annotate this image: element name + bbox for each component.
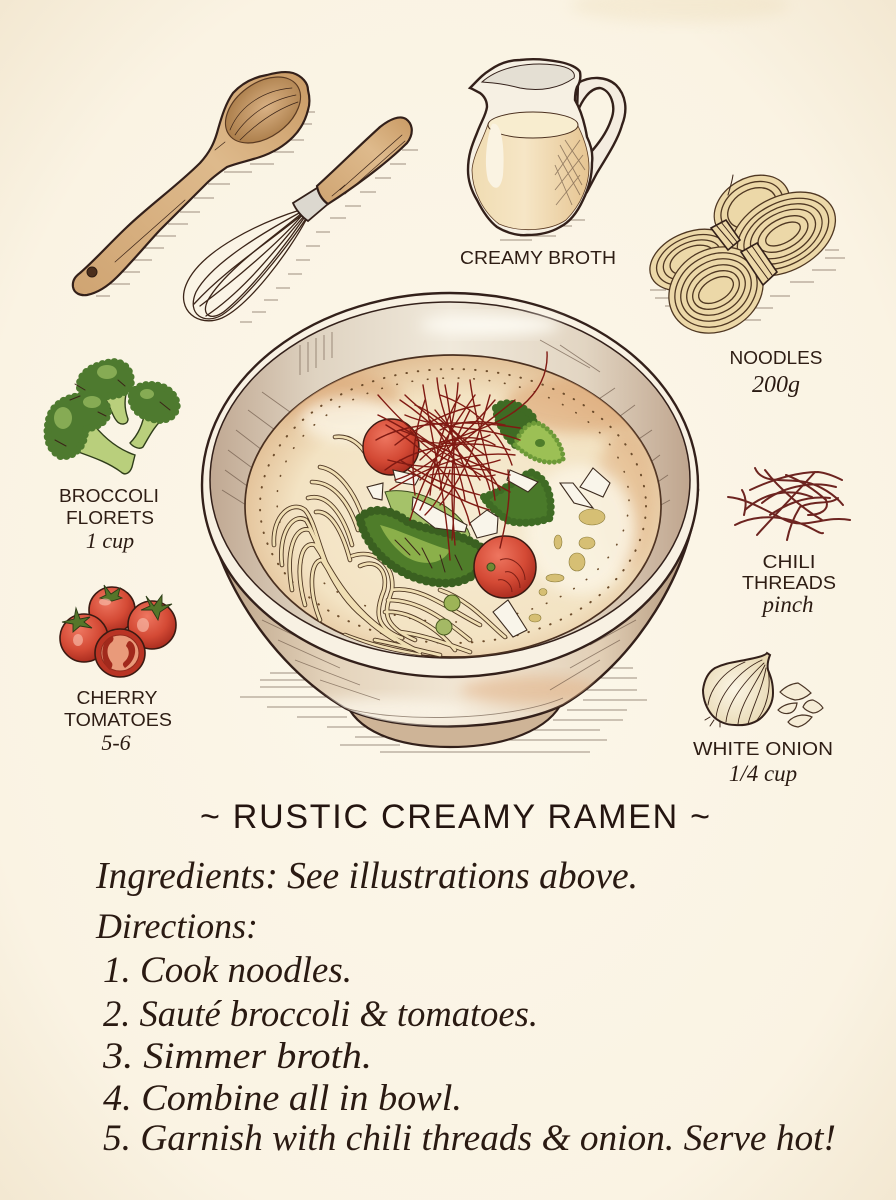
label: noodles: NOODLES: [730, 348, 822, 368]
directions heading: Directions:: [95, 906, 258, 946]
step 5: 5. Garnish with chili threads & onion. Serve hot!: [103, 1118, 836, 1159]
label: creamy broth: CREAMY BROTH: [460, 248, 616, 268]
icon: cherry tomatoes: [60, 585, 176, 677]
bowl inner wall: [210, 302, 690, 658]
label: cherry tomatoes: CHERRY: [76, 688, 158, 708]
label: cherry tomatoes: 5-6: [101, 730, 131, 755]
broccoli upper right: [496, 403, 563, 462]
icon: chili threads: [728, 468, 850, 540]
label: chili threads: THREADS: [742, 573, 836, 593]
icon: wooden spoon: [73, 63, 315, 296]
icon: broth pitcher: [468, 59, 625, 240]
title: ~ RUSTIC CREAMY RAMEN ~: [200, 798, 710, 836]
label: broccoli florets: FLORETS: [66, 508, 154, 528]
broth washes, speckles and noodles: [260, 369, 655, 655]
label: white onion: WHITE ONION: [693, 739, 833, 759]
ingredients line: Ingredients: See illustrations above.: [95, 855, 638, 897]
icon: noodle bundle: [641, 162, 850, 350]
onion pieces: [367, 468, 610, 637]
creamy broth surface: [245, 355, 661, 657]
icon: whisk: [184, 117, 418, 322]
icon: broccoli: [48, 362, 177, 474]
label: chili threads: [742, 552, 836, 617]
step 1: 1. Cook noodles.: [103, 950, 352, 991]
label: noodles: 200g: [752, 372, 800, 398]
bowl outer wall: [204, 490, 698, 726]
peas and oil droplets: [436, 509, 605, 635]
label: noodles: [730, 348, 822, 398]
step 4: 4. Combine all in bowl.: [103, 1078, 462, 1119]
label: broccoli florets: BROCCOLI: [59, 486, 159, 506]
bowl rim: [202, 293, 698, 677]
tomato left: [363, 419, 419, 475]
label: white onion: 1/4 cup: [729, 761, 797, 786]
text: recipe directions: [95, 855, 836, 1159]
label: broccoli florets: 1 cup: [86, 528, 134, 553]
bowl wall wash: [250, 600, 650, 726]
tomato right: [474, 536, 536, 598]
step 2: 2. Sauté broccoli & tomatoes.: [103, 994, 538, 1035]
table hatching: [240, 668, 647, 752]
label: broccoli florets: [59, 486, 159, 553]
label: chili threads: pinch: [760, 592, 814, 617]
chili thread garnish: [376, 352, 547, 560]
label: cherry tomatoes: TOMATOES: [64, 710, 172, 730]
broccoli right middle: [484, 472, 551, 523]
label: white onion: [693, 739, 833, 786]
icon: white onion: [703, 653, 823, 727]
bowl foot: [345, 700, 563, 747]
step 3: 3. Simmer broth.: [102, 1036, 372, 1077]
illustration: ramen bowl: [202, 293, 698, 752]
label: cherry tomatoes: [64, 688, 172, 755]
label: chili threads: CHILI: [762, 552, 816, 572]
broccoli large: [360, 491, 487, 583]
inner wall shading: [222, 315, 670, 512]
